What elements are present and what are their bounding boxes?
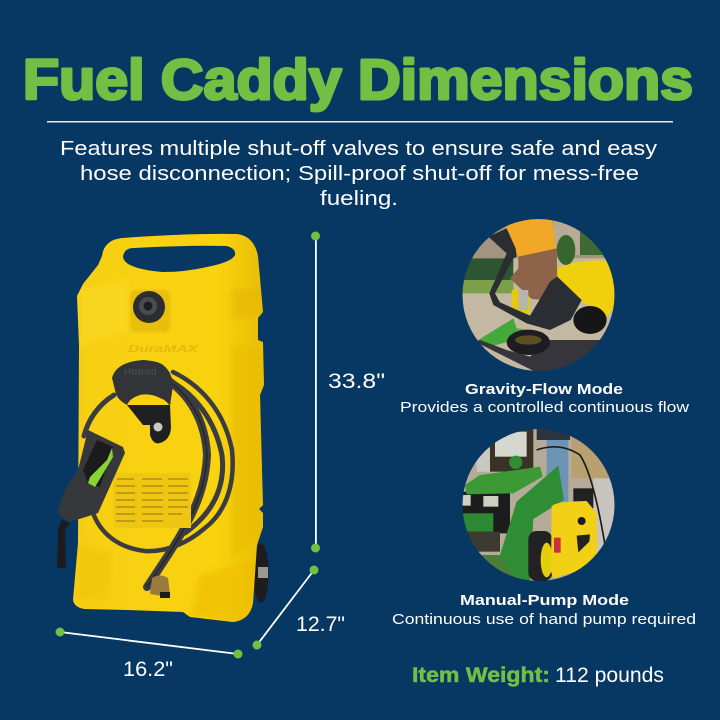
gravity-flow heading: Gravity-Flow Mode [465,381,623,398]
description: hose disconnection; Spill-proof shut-off for mess-free [80,162,639,185]
width dimension: 16.2" [123,657,173,681]
hose hanger: Hotrod [124,367,157,378]
fuel nozzle [57,430,125,568]
item weight: Item Weight: [412,664,550,687]
depth dimension [252,566,345,650]
description: Features multiple shut-off valves to ensure safe and easy [60,137,658,160]
photo: manual-pump tractor [462,429,614,581]
wheel [254,543,268,603]
height dimension: 33.8" [328,369,385,393]
handle opening [123,246,235,272]
height dimension [311,232,385,552]
brand emboss: DuraMAX [128,344,200,355]
item weight [412,664,664,687]
tank body [73,234,264,622]
manual-pump description: Continuous use of hand pump required [392,611,696,628]
manual-pump heading: Manual-Pump Mode [460,592,629,609]
description: fueling. [320,187,398,210]
description [60,137,658,210]
hose hanger [112,360,173,443]
item weight: 112 pounds [555,664,664,687]
warning label [113,473,191,528]
brass valve [150,576,170,598]
fill cap [133,291,165,323]
width dimension [56,628,242,681]
gravity-flow description: Provides a controlled continuous flow [400,399,689,416]
fuel caddy product image [57,234,268,625]
photo: gravity-flow nozzle [462,219,614,371]
title rule [47,121,673,122]
depth dimension: 12.7" [296,612,345,636]
tank shading [76,280,262,625]
fill cap recess [130,290,170,332]
hose [84,372,233,587]
title: Fuel Caddy Dimensions [23,48,693,112]
